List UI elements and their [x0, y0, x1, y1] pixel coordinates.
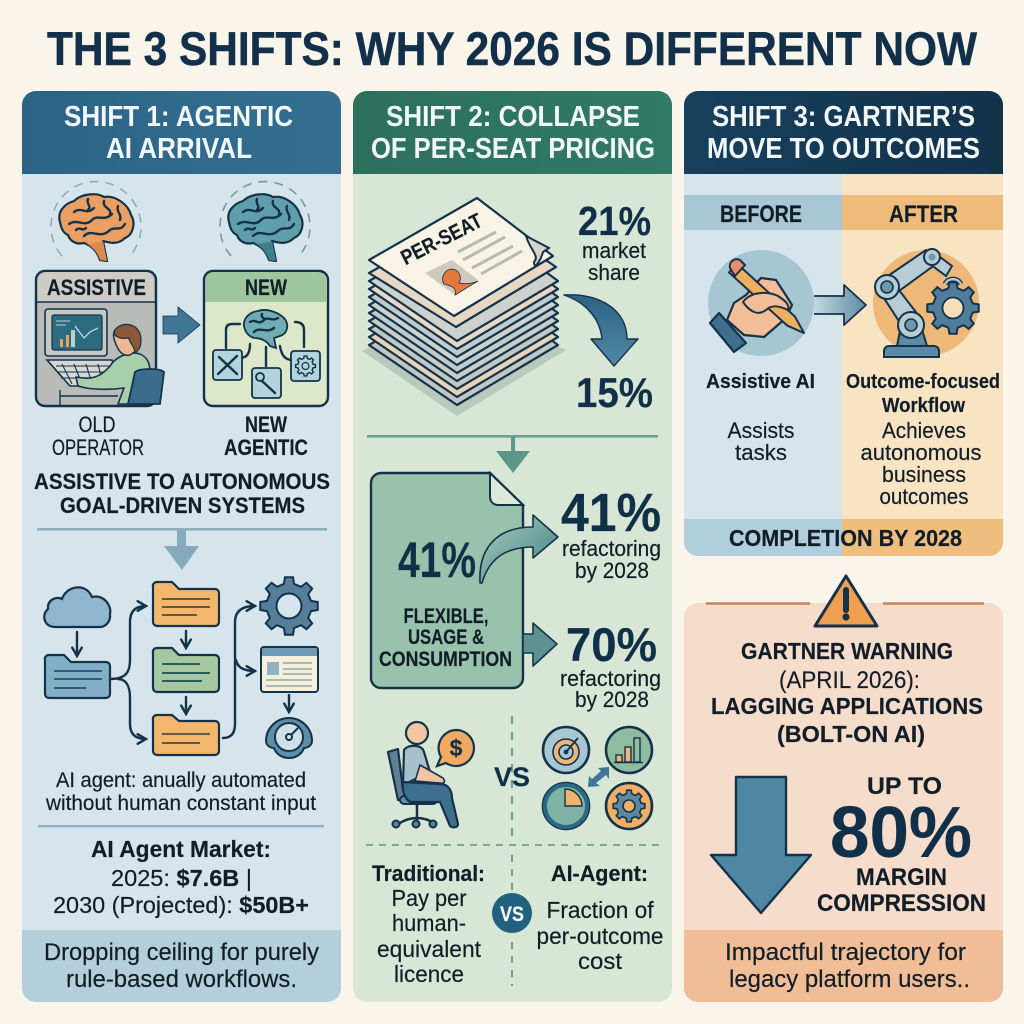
text: AI-agent pricing: Fraction of	[546, 897, 654, 923]
stat: up to 80 percent margin compression: MARGIN	[856, 864, 947, 891]
panel: new agentic: NEW	[245, 275, 287, 300]
diagram: agent workflow	[44, 577, 318, 758]
label: new agentic	[224, 412, 308, 460]
badge: VS	[492, 893, 532, 933]
stat: 21 percent market share: share	[588, 260, 640, 285]
subheading: assistive to autonomous: ASSISTIVE TO AUTONOMOUS	[34, 469, 330, 494]
icon: teal brain	[220, 182, 310, 261]
icon: double arrow	[588, 767, 609, 787]
text: agent description	[45, 769, 316, 815]
heading: shift 1	[22, 91, 341, 174]
text: agent description: AI agent: anually automated	[56, 769, 306, 792]
icon: flexible usage document: FLEXIBLE,	[404, 605, 488, 628]
icon: flexible usage document: CONSUMPTION	[379, 648, 512, 671]
panel: shift 2 collapse of per-seat pricing	[353, 91, 672, 1002]
heading: shift 3: MOVE TO OUTCOMES	[707, 133, 980, 165]
text: assistive AI	[706, 371, 815, 465]
icon: target circle	[543, 727, 589, 773]
text: warning statement: GARTNER WARNING	[741, 638, 953, 664]
heading: shift 3	[684, 91, 1003, 174]
icon: tool tile	[213, 350, 242, 380]
text: outcome-focused workflow: Achieves	[882, 418, 966, 443]
heading: before	[684, 195, 842, 230]
icon: flexible usage document: USAGE &	[408, 626, 484, 649]
icon: green folder	[153, 648, 219, 692]
heading: after	[842, 195, 1003, 230]
stat: up to 80 percent margin compression	[817, 773, 986, 917]
stat: 70 percent refactoring: 70%	[566, 618, 657, 671]
icon: small brain	[244, 310, 287, 348]
stat: up to 80 percent margin compression: UP TO	[867, 773, 942, 800]
text: AI-agent pricing	[536, 861, 664, 974]
icon: gear tile	[291, 351, 320, 381]
stat: up to 80 percent margin compression: 80%	[830, 793, 972, 873]
icon: cloud	[44, 587, 110, 627]
icon: wrench tile	[252, 368, 281, 398]
text: warning statement	[711, 638, 983, 747]
text: AI agent market: 2025: $7.6B |	[111, 865, 252, 891]
text: AI-agent pricing: per-outcome	[536, 923, 664, 949]
stat: 41 percent refactoring	[561, 483, 661, 583]
text: traditional pricing: licence	[394, 961, 464, 987]
label: VS: VS	[494, 762, 530, 792]
heading: shift 3: SHIFT 3: GARTNER’S	[712, 101, 975, 133]
arrow: curved to 41 percent	[480, 515, 558, 583]
panel: assistive operator	[36, 271, 164, 406]
subheading: assistive to autonomous: GOAL-DRIVEN SYSTEMS	[60, 493, 305, 518]
icon: pie chart circle	[543, 783, 589, 829]
badge: VS: VS	[500, 903, 524, 926]
icon: seated person with dollar bubble	[388, 722, 474, 828]
text: outcome-focused workflow	[846, 371, 1000, 509]
icon: warning triangle	[815, 576, 877, 626]
text: agent description: without human constant input	[45, 792, 316, 815]
footer: completion by 2028	[684, 519, 1003, 556]
icon: gear	[260, 577, 318, 635]
text: traditional pricing: human-	[392, 910, 466, 936]
heading: shift 2	[353, 91, 672, 174]
icon: orange brain	[51, 182, 141, 261]
arrow: margin decline	[711, 777, 811, 913]
stat: 41 percent refactoring: 41%	[561, 483, 661, 543]
icon: gear circle	[606, 783, 652, 829]
text: traditional pricing: equivalent	[377, 936, 482, 962]
text: assistive AI: Assistive AI	[706, 371, 815, 393]
panel: gartner warning	[684, 576, 1003, 1002]
arrow: to 70 percent	[523, 623, 557, 666]
icon: flexible usage document	[371, 473, 523, 688]
label: old operator: OLD	[78, 412, 116, 437]
heading: shift 2: OF PER-SEAT PRICING	[371, 133, 655, 165]
text: AI agent market	[53, 836, 309, 918]
text: AI-agent pricing: cost	[578, 948, 623, 974]
arrows: flow connectors	[77, 606, 289, 739]
icon: orange folder bottom	[153, 715, 219, 755]
footer: impactful trajectory: Impactful trajectory for	[725, 939, 966, 966]
stat: 15 percent: 15%	[576, 369, 653, 416]
text: traditional pricing	[372, 861, 485, 987]
stat: 70 percent refactoring	[560, 618, 661, 712]
footer: impactful trajectory: legacy platform users..	[729, 966, 970, 993]
stat: 21 percent market share	[578, 198, 651, 285]
stat: 70 percent refactoring: refactoring	[560, 666, 661, 691]
heading: shift 1: SHIFT 1: AGENTIC	[64, 101, 293, 133]
stat: 70 percent refactoring: by 2028	[575, 687, 649, 712]
label: per-seat: PER-SEAT	[397, 209, 486, 270]
heading: shift 2: SHIFT 2: COLLAPSE	[386, 101, 640, 133]
label: new agentic: NEW	[245, 412, 287, 437]
connectors	[226, 322, 304, 366]
icon: speed gauge	[266, 718, 312, 758]
text: warning statement: LAGGING APPLICATIONS	[711, 693, 983, 719]
panel: assistive operator: ASSISTIVE	[47, 275, 146, 300]
panel: new agentic	[204, 271, 328, 406]
text: traditional pricing: Pay per	[392, 885, 467, 911]
text: assistive AI: tasks	[735, 440, 787, 465]
icon: per-seat paper stack	[362, 198, 566, 416]
text: warning statement: (APRIL 2026):	[779, 667, 920, 694]
icon: hand with pencil	[708, 250, 814, 356]
icon: seated person with dollar bubble: $	[450, 735, 463, 761]
heading: after: AFTER	[889, 201, 958, 228]
arrow: assistive to agentic	[163, 307, 200, 343]
icon: keyboard	[47, 360, 120, 405]
footer: dropping ceiling: rule-based workflows.	[66, 966, 297, 993]
arrow: section down	[367, 435, 658, 473]
text: warning statement: (BOLT-ON AI)	[777, 721, 925, 747]
stat: 41 percent refactoring: by 2028	[575, 558, 649, 583]
subheading: assistive to autonomous	[34, 469, 330, 518]
label: old operator	[52, 412, 144, 460]
icon: browser window	[261, 647, 318, 692]
footer: dropping ceiling	[22, 930, 341, 1002]
icon: robot arm with gear	[873, 249, 979, 357]
heading: shift 1: AI ARRIVAL	[106, 133, 252, 165]
text: outcome-focused workflow: business	[882, 462, 966, 487]
arrow: 21 to 15	[564, 295, 638, 366]
icon: operator person	[76, 324, 164, 404]
panel: shift 1 agentic AI arrival	[22, 91, 341, 1002]
text: AI agent market: AI Agent Market:	[91, 836, 271, 862]
icon: flexible usage document: 41%	[398, 532, 476, 588]
arrow: before to after	[814, 285, 866, 325]
text: outcome-focused workflow: Workflow	[882, 395, 965, 417]
text: outcome-focused workflow: Outcome-focused	[846, 371, 1000, 393]
icon: blue folder	[45, 655, 110, 698]
text: assistive AI: Assists	[728, 418, 794, 443]
icon: bar chart circle	[606, 727, 652, 773]
text: AI agent market: 2030 (Projected): $50B+	[53, 892, 309, 918]
footer: dropping ceiling: Dropping ceiling for purely	[44, 939, 319, 966]
icon: monitor	[45, 309, 107, 356]
stat: 21 percent market share: market	[582, 238, 646, 263]
stat: 41 percent refactoring: refactoring	[562, 536, 661, 561]
footer: completion by 2028: COMPLETION BY 2028	[729, 525, 962, 551]
heading: before: BEFORE	[720, 201, 802, 228]
panel: shift 3 gartner's move to outcomes	[684, 91, 1003, 556]
stat: 21 percent market share: 21%	[578, 198, 651, 244]
stat: up to 80 percent margin compression: COMPRESSION	[817, 890, 986, 917]
text: outcome-focused workflow: autonomous	[860, 440, 982, 465]
label: old operator: OPERATOR	[52, 435, 144, 460]
icon: orange folder top	[153, 582, 219, 626]
text: outcome-focused workflow: outcomes	[880, 484, 968, 509]
label: new agentic: AGENTIC	[224, 435, 308, 460]
footer: impactful trajectory	[684, 930, 1003, 1002]
text: traditional pricing: Traditional:	[372, 861, 485, 886]
text: AI-agent pricing: AI-Agent:	[551, 861, 648, 886]
arrow: divider down	[37, 528, 327, 570]
